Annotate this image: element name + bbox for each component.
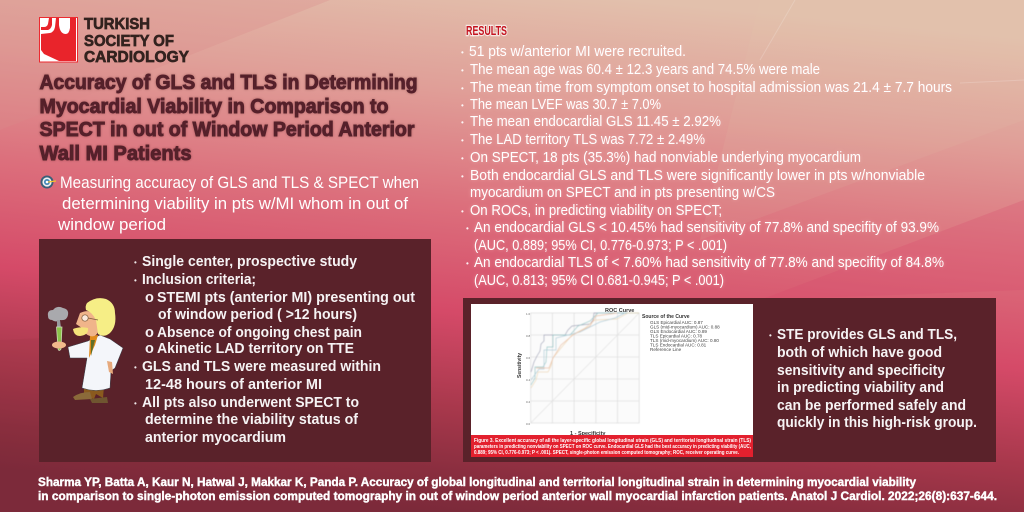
title: Myocardial Viability in Comparison to <box>40 96 388 118</box>
arm on hip <box>107 361 113 374</box>
results list: • <box>466 224 469 233</box>
results list: An endocardial GLS < 10.45% had sensitivity of 77.8% and specifity of 93.9% <box>474 220 939 236</box>
organisation name: CARDIOLOGY <box>84 49 189 66</box>
chart: ROC curve figure: 0.0 <box>526 422 531 426</box>
figure caption: parameters in predicting nonviability on SPECT on ROC curve. Endocardial GLS had the best accuracy in predicting viability (AUC, <box>474 444 751 450</box>
results list: An endocardial TLS of < 7.60% had sensitivity of 77.8% and specifity of 84.8% <box>474 255 944 271</box>
icon: scientist cartoon <box>48 298 123 403</box>
organisation name: SOCIETY OF <box>84 33 174 50</box>
chart: ROC curve figure: 1 - Specificity <box>570 431 606 437</box>
legend: GLS Epicardial AUC: 0.87 <box>650 320 703 325</box>
conclusion text: can be performed safely and <box>777 398 966 414</box>
legend: GLS (mid-myocardium) AUC: 0.88 <box>650 324 720 330</box>
results list: On ROCs, in predicting viability on SPECT; <box>470 203 722 219</box>
results list: 51 pts w/anterior MI were recruited. <box>469 44 686 60</box>
results list: The LAD territory TLS was 7.72 ± 2.49% <box>470 132 705 148</box>
panel: conclusion and ROC figure <box>463 298 996 462</box>
conclusion text: sensitivity and specificity <box>777 363 945 379</box>
hand <box>52 342 66 348</box>
methods list: • <box>134 399 137 408</box>
logo: Turkish Society of Cardiology <box>40 16 189 66</box>
smoke <box>48 307 68 322</box>
results list: The mean time from symptom onset to hospital admission was 21.4 ± 7.7 hours <box>470 80 952 96</box>
results list: Both endocardial GLS and TLS were significantly lower in pts w/nonviable <box>470 168 925 184</box>
results list: • <box>466 259 469 268</box>
chart: ROC curve figure: 0.4 <box>526 378 531 382</box>
results list: The mean age was 60.4 ± 12.3 years and 74.5% were male <box>470 62 820 78</box>
legend: Source of the Curve <box>642 314 690 320</box>
objective text: window period <box>57 215 166 234</box>
title: SPECT in out of Window Period Anterior <box>40 119 415 141</box>
methods list: determine the viability status of <box>145 412 358 428</box>
methods list: of window period ( >12 hours) <box>158 307 357 323</box>
results list: • <box>461 154 464 163</box>
methods list: o <box>145 341 154 357</box>
icon: heart emblem <box>40 18 78 62</box>
methods list: o <box>145 290 154 306</box>
methods list: All pts also underwent SPECT to <box>142 395 359 411</box>
title: Wall MI Patients <box>40 143 192 165</box>
citation: Sharma YP, Batta A, Kaur N, Hatwal J, Makkar K, Panda P. Accuracy of global longitudinal and territorial longitudinal strain in determining myocardial viability <box>38 477 917 489</box>
methods list: • <box>134 363 137 372</box>
lab coat <box>68 335 123 390</box>
methods list: STEMI pts (anterior MI) presenting out <box>157 290 415 306</box>
panel: methods <box>39 239 431 462</box>
results list: • <box>461 136 464 145</box>
methods list: 12-48 hours of anterior MI <box>145 377 322 393</box>
methods list: anterior myocardium <box>145 430 286 446</box>
figure caption <box>471 435 753 457</box>
conclusion text: • <box>769 331 772 340</box>
chart: ROC curve figure <box>471 304 753 437</box>
conclusion text: in predicting viability and <box>777 380 944 396</box>
results list: (AUC, 0.813; 95% CI 0.681-0.945; P < .001) <box>474 273 724 289</box>
results list: • <box>461 48 464 57</box>
legs <box>84 386 104 399</box>
results heading: RESULTS <box>466 24 507 38</box>
legend: Reference Line <box>650 347 682 352</box>
glasses <box>82 315 88 321</box>
results list: • <box>461 207 464 216</box>
legend: TLS Endocardial AUC: 0.81 <box>650 342 707 348</box>
legend <box>642 314 720 352</box>
conclusion text <box>769 327 977 431</box>
hair <box>86 298 115 336</box>
methods list: Inclusion criteria; <box>142 272 256 288</box>
figure caption: 0.889; 95% CI, 0.776-0.973; P < .001). SPECT, single-photon emission computed tomography; ROC, receiver operating curve. <box>474 450 739 456</box>
title <box>40 72 418 165</box>
figure caption: Figure 3. Excellent accuracy of all the layer-specific global longitudinal strain (GLS) and territorial longitudinal strain (TLS) <box>474 438 751 444</box>
methods list <box>134 254 415 446</box>
results list: The mean endocardial GLS 11.45 ± 2.92% <box>470 114 721 130</box>
chart: ROC curve figure: 0.2 <box>526 400 531 404</box>
chart: ROC curve figure: 0.6 <box>526 356 531 360</box>
legend: TLS (mid-myocardium) AUC: 0.80 <box>650 338 719 343</box>
conclusion text: quickly in this high-risk group. <box>777 415 977 431</box>
tie <box>89 335 98 358</box>
results list: • <box>461 172 464 181</box>
conclusion text: STE provides GLS and TLS, <box>777 327 957 343</box>
chart title: ROC Curve <box>605 308 634 314</box>
chart: ROC curve figure: 0.8 <box>526 334 531 338</box>
legend: TLS Epicardial AUC: 0.78 <box>650 334 703 338</box>
results list: (AUC, 0.889; 95% CI, 0.776-0.973; P < .001) <box>474 238 727 254</box>
legend: GLS Endocardial AUC: 0.89 <box>650 329 707 334</box>
objective text: Measuring accuracy of GLS and TLS & SPECT when <box>60 173 419 192</box>
methods list: Single center, prospective study <box>142 254 357 270</box>
objective text <box>57 173 419 234</box>
title: Accuracy of GLS and TLS in Determining <box>40 72 418 94</box>
results list: The mean LVEF was 30.7 ± 7.0% <box>470 97 661 113</box>
organisation name: TURKISH <box>84 16 150 33</box>
test tube <box>56 327 62 350</box>
methods list: Absence of ongoing chest pain <box>157 325 362 341</box>
methods list: • <box>134 276 137 285</box>
axis labels: Sensitivity <box>517 353 523 378</box>
results list: • <box>461 101 464 110</box>
results list: • <box>461 66 464 75</box>
icon: target <box>40 176 56 188</box>
results list: • <box>461 84 464 93</box>
chart: ROC curve figure: 1.0 <box>526 312 531 316</box>
plot area <box>531 313 639 423</box>
objective text: determining viability in pts w/MI whom in out of <box>62 194 408 213</box>
methods list: GLS and TLS were measured within <box>142 359 381 375</box>
shoes <box>73 392 92 400</box>
results list <box>461 44 952 289</box>
methods list: o <box>145 325 154 341</box>
citation: in comparison to single-photon emission computed tomography in out of window period anterior wall myocardial infarction patients. Anatol J Cardiol. 2022;26(8):637-644. <box>38 491 997 503</box>
methods list: • <box>134 258 137 267</box>
face <box>76 311 99 336</box>
results list: myocardium on SPECT and in pts presenting w/CS <box>470 185 775 201</box>
moustache <box>73 327 88 336</box>
citation <box>38 477 997 503</box>
conclusion text: both of which have good <box>777 345 942 361</box>
methods list: Akinetic LAD territory on TTE <box>157 341 354 357</box>
results list: On SPECT, 18 pts (35.3%) had nonviable underlying myocardium <box>470 150 861 166</box>
results list: • <box>461 118 464 127</box>
organisation name <box>84 16 189 66</box>
